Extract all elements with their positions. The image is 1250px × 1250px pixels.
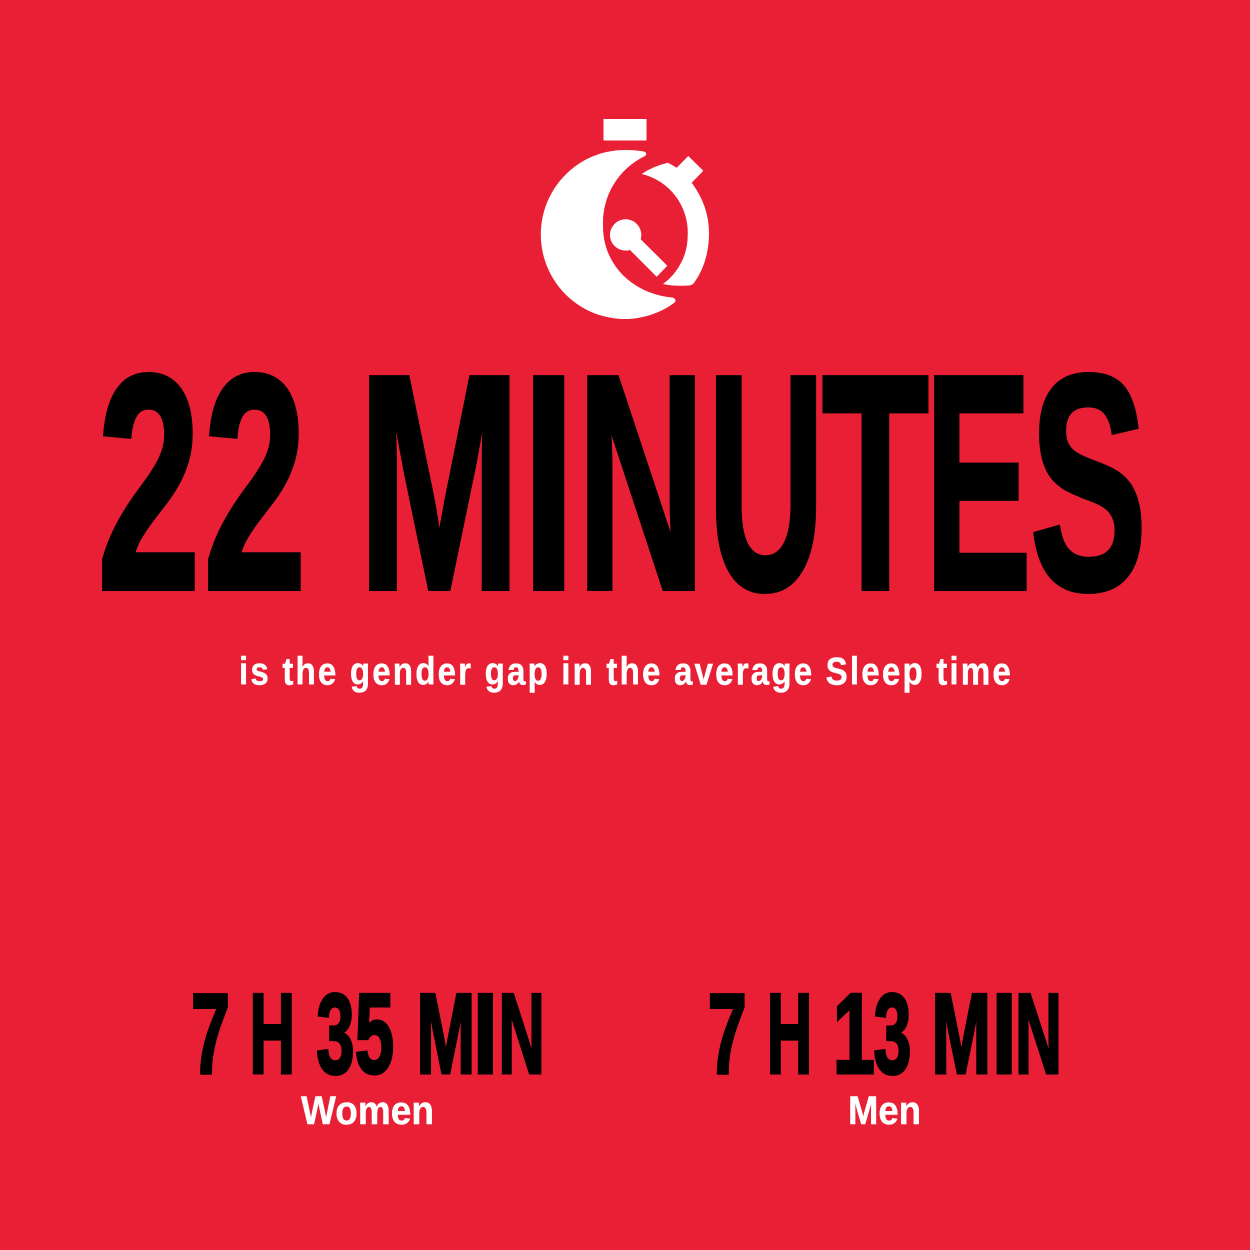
subheading: is the gender gap in the average Sleep time: [239, 649, 1011, 693]
headline: 22 MINUTES: N: [576, 311, 706, 655]
headline: 22 MINUTES: I: [521, 311, 576, 655]
men sleep time value: N: [1015, 971, 1062, 1098]
men label: Men: [848, 1089, 921, 1133]
headline: 22 MINUTES: S: [1029, 311, 1147, 655]
men sleep time value: H: [767, 971, 812, 1098]
women sleep time value: H: [249, 971, 295, 1098]
stat: men: [708, 971, 1062, 1133]
headline: 22 MINUTES: T: [822, 311, 929, 655]
men sleep time value: I: [992, 971, 1016, 1098]
men sleep time value: 7: [708, 971, 747, 1098]
headline: 22 MINUTES: 2: [203, 311, 307, 655]
women label: Women: [301, 1089, 434, 1133]
women sleep time value: M: [416, 971, 475, 1098]
headline: 22 MINUTES: E: [924, 311, 1032, 655]
men sleep time value: 3: [874, 971, 912, 1098]
headline: 22 MINUTES: 2: [97, 311, 201, 655]
headline: 22 MINUTES: U: [707, 311, 825, 655]
men sleep time value: M: [931, 971, 991, 1098]
icon: stopwatch with crescent moon: [541, 119, 709, 319]
headline: 22 MINUTES: M: [357, 311, 521, 655]
women sleep time value: 5: [355, 971, 394, 1098]
women sleep time value: 3: [316, 971, 355, 1098]
stat: women: [191, 971, 545, 1133]
men sleep time value: 1: [833, 971, 875, 1098]
women sleep time value: N: [498, 971, 545, 1098]
women sleep time value: 7: [191, 971, 230, 1098]
women sleep time value: I: [473, 971, 498, 1098]
